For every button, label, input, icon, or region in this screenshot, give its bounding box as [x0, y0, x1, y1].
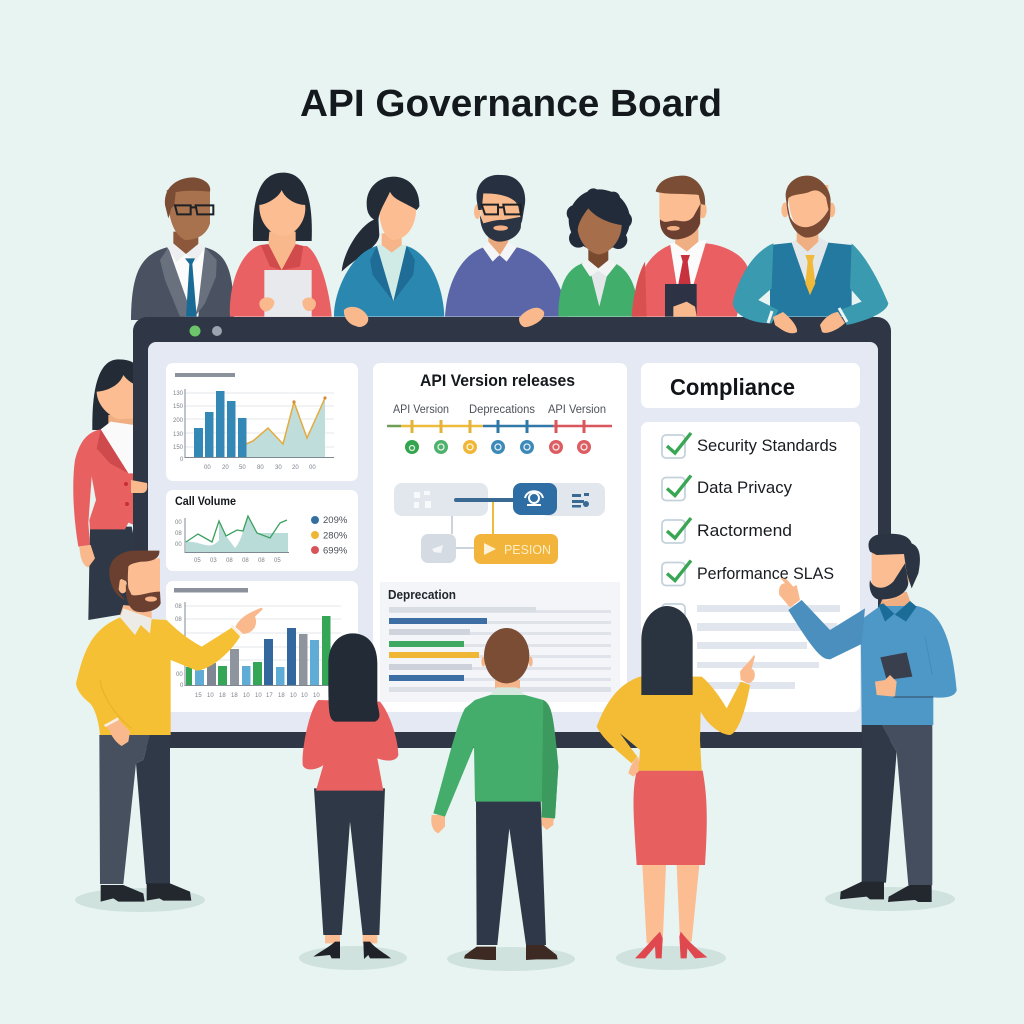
panel: call volume: 03: [210, 558, 217, 564]
panel: bottom bar chart: [166, 581, 358, 712]
panel: call volume: 08: [175, 531, 182, 537]
legend: 209%: [323, 515, 348, 526]
timeline: [387, 420, 612, 454]
person: woman with curly hair: [558, 188, 638, 317]
panel: call volume: 00: [175, 542, 182, 548]
panel: API version releases: API Version: [393, 404, 449, 416]
person: woman with ponytail: [334, 177, 444, 317]
person: woman in yellow top and red skirt: [597, 606, 755, 958]
panel: top line and bar chart: 150: [173, 404, 184, 410]
legend: 280%: [323, 530, 348, 542]
board members row, right part: [558, 176, 852, 317]
status dots: [190, 326, 222, 336]
panel: top line and bar chart: 20: [292, 465, 299, 471]
person: man in grey suit: [131, 177, 234, 323]
panel: compliance checklist: Security Standards: [697, 436, 837, 455]
panel: bottom bar chart: 10: [255, 693, 262, 699]
panel: bottom bar chart: 00: [176, 672, 183, 678]
panel: bottom bar chart: 17: [266, 693, 273, 699]
legend: [311, 515, 348, 556]
hands on the board: [131, 307, 845, 493]
person: man in red jacket with phone: [632, 176, 748, 317]
panel: top line and bar chart: 00: [204, 465, 211, 471]
panel: compliance heading: [641, 363, 860, 408]
title: API Governance Board: [300, 83, 722, 125]
panel: top line and bar chart: 130: [173, 432, 184, 438]
board members row, left part: [131, 173, 568, 323]
panel: top line and bar chart: [166, 363, 358, 481]
screen: [148, 342, 878, 732]
panel: API version releases: API Version releases: [420, 371, 575, 390]
panel: API version releases: [373, 363, 627, 712]
person: yellow sweater man, lower body: [99, 680, 191, 902]
panel: call volume: Call Volume: [175, 494, 236, 508]
people viewing the board from behind: [303, 606, 755, 960]
panel: top line and bar chart: 150: [173, 445, 184, 451]
panel: bottom bar chart: 10: [290, 693, 297, 699]
panel: bottom bar chart: 10: [313, 693, 320, 699]
deprecation list: [380, 582, 620, 702]
panel: top line and bar chart: 30: [275, 465, 282, 471]
panel: compliance checklist: Performance SLAS: [697, 564, 834, 583]
floor shadows: [75, 887, 955, 971]
sleeves of the man in blue vest, over the board: [733, 243, 888, 325]
panel: compliance checklist: Ractormend: [697, 521, 792, 540]
flow diagram: PESION: [504, 542, 551, 557]
panel: call volume: 08: [242, 558, 249, 564]
panel: top line and bar chart: 50: [239, 465, 246, 471]
panel: top line and bar chart: 200: [173, 418, 184, 424]
panel: bottom bar chart: 10: [207, 693, 214, 699]
presentation board frame: [133, 317, 891, 748]
panel: bottom bar chart: 0: [180, 683, 184, 689]
person: standing woman at left of board: [73, 359, 148, 620]
panel: API version releases: Deprecations: [469, 404, 535, 416]
legend: 699%: [323, 546, 348, 556]
panel: bottom bar chart: 10: [301, 693, 308, 699]
person: man in blue vest with yellow tie: [770, 176, 852, 317]
person: bearded man with glasses: [445, 175, 568, 317]
panel: compliance checklist: [641, 422, 860, 712]
panel: top line and bar chart: 130: [173, 391, 184, 397]
panel: call volume: 05: [274, 558, 281, 564]
panel: call volume: [166, 490, 358, 571]
person: woman in red top: [303, 633, 398, 959]
panel: bottom bar chart: 18: [231, 693, 238, 699]
person: man in green sweater: [431, 628, 558, 960]
panel: top line and bar chart: 0: [180, 457, 184, 463]
panel: bottom bar chart: 18: [219, 693, 226, 699]
panel: bottom bar chart: 18: [278, 693, 285, 699]
panel: call volume: 08: [226, 558, 233, 564]
person: woman with document: [230, 173, 332, 317]
panel: compliance heading: Compliance: [670, 374, 795, 400]
person: man with blue sweater, upper body: [779, 534, 957, 725]
panel: call volume: 08: [258, 558, 265, 564]
deprecation list: Deprecation: [388, 588, 456, 602]
panel: top line and bar chart: 20: [222, 465, 229, 471]
flow diagram: [394, 483, 605, 564]
panel: bottom bar chart: 08: [175, 617, 182, 623]
panel: call volume: 05: [194, 558, 201, 564]
panel: bottom bar chart: 08: [175, 604, 182, 610]
white cuffs: [768, 308, 847, 323]
panel: bottom bar chart: 10: [243, 693, 250, 699]
panel: top line and bar chart: 80: [257, 465, 264, 471]
panel: bottom bar chart: 15: [195, 693, 202, 699]
person: yellow sweater man, upper body: [76, 551, 263, 735]
panel: call volume: 00: [175, 520, 182, 526]
person: man with blue sweater, legs: [840, 725, 932, 902]
panel: API version releases: API Version: [548, 404, 606, 416]
panel: compliance checklist: Data Privacy: [697, 478, 792, 497]
panel: top line and bar chart: 00: [309, 465, 316, 471]
